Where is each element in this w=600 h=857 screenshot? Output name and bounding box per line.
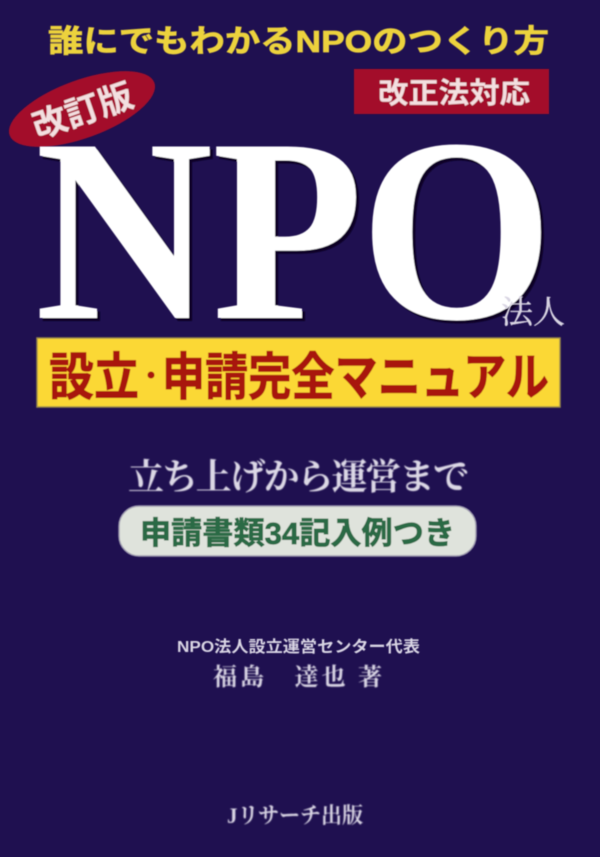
main title NPO: N xyxy=(38,88,216,378)
main title NPO: N xyxy=(35,85,213,375)
main title NPO: O xyxy=(363,88,556,378)
tagline: 立ち上げから運営まで xyxy=(128,457,469,497)
pill: application forms: 申請書類34記入例つき xyxy=(140,516,455,551)
publisher: Jリサーチ出版 xyxy=(227,803,363,828)
badge: revised edition xyxy=(0,55,164,163)
suffix: 法人 xyxy=(501,294,565,330)
top tagline: 誰にでもわかるNPOのつくり方 xyxy=(48,24,549,59)
pill: application forms xyxy=(119,506,476,556)
author name: 福島 達也 著 xyxy=(213,664,382,691)
subtitle banner xyxy=(37,338,560,407)
author affiliation: NPO法人設立運営センター代表 xyxy=(177,637,420,656)
subtitle banner: 設立 xyxy=(49,349,139,406)
main title NPO: P xyxy=(212,85,363,375)
badge: revised edition: 改訂版 xyxy=(28,77,138,147)
main title NPO: P xyxy=(215,88,366,378)
main title NPO xyxy=(35,85,556,378)
main title NPO: O xyxy=(360,85,553,375)
badge: revised law: 改正法対応 xyxy=(378,77,530,110)
badge: revised law xyxy=(354,69,549,114)
